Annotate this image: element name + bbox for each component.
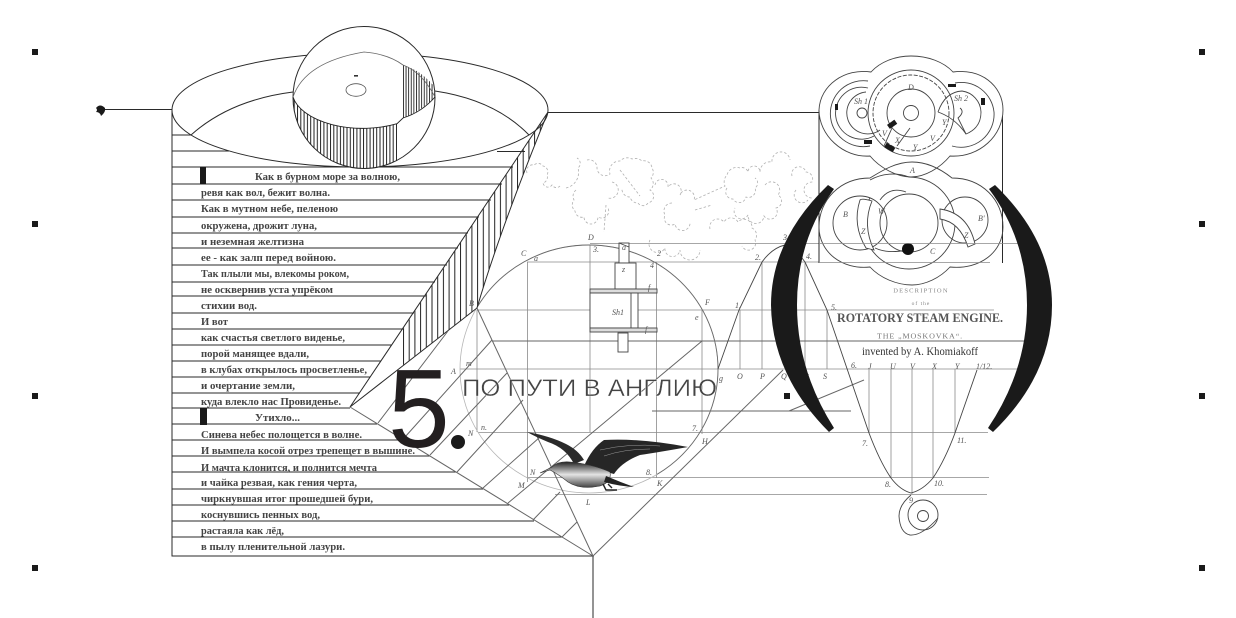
- engine diagram frame: [548, 110, 1002, 263]
- diagram letter labels: Y: [955, 362, 961, 371]
- diagram letter labels: Sh 1: [854, 97, 868, 106]
- upper engine section: [819, 56, 1003, 177]
- diagram letter labels: Sh1: [612, 308, 624, 317]
- diagram letter labels: m: [466, 359, 472, 368]
- diagram letter labels: 6.: [851, 361, 857, 370]
- poem text: не осквернив уста упрёком: [201, 284, 333, 296]
- diagram letter labels: U: [890, 362, 897, 371]
- diagram letter labels: 9: [909, 496, 913, 505]
- poem text: И вот: [201, 316, 229, 328]
- unfolded strip with diagonal lines: [350, 308, 783, 556]
- diagram letter labels: N: [467, 429, 474, 438]
- poem text: в пылу пленительной лазури.: [201, 541, 345, 553]
- engine description title: DESCRIPTION: [893, 288, 949, 294]
- diagram letter labels: M: [517, 481, 526, 490]
- diagram letter labels: 11.: [957, 436, 966, 445]
- diagram letter labels: 5.: [831, 303, 837, 312]
- engine description title: THE „MOSKOVKA“.: [877, 332, 963, 340]
- diagram letter labels: Z: [861, 227, 866, 236]
- black bar first stanza: [200, 167, 206, 184]
- diagram letter labels: 3: [782, 233, 787, 242]
- diagram letter labels: V: [930, 134, 936, 143]
- poem text: Как в бурном море за волною,: [255, 171, 400, 183]
- engine description title: invented by A. Khomiakoff: [862, 344, 978, 358]
- poem text: как счастья светлого виденье,: [201, 332, 345, 344]
- poem text: ревя как вол, бежит волна.: [201, 187, 330, 199]
- poem text: Как в мутном небе, пеленою: [201, 203, 338, 215]
- poem text: И мачта клонится, и полнится мечта: [201, 462, 377, 474]
- sine and parabola curve: [718, 245, 977, 493]
- diagram letter labels: g: [719, 374, 723, 383]
- cam at base of parabola: [899, 495, 938, 535]
- diagram letter labels: Q: [781, 372, 787, 381]
- diagram letter labels: 4: [650, 261, 654, 270]
- diagram letter labels: B: [469, 299, 474, 308]
- diagram letter labels: O: [737, 372, 743, 381]
- diagram letter labels: e: [695, 313, 699, 322]
- diagram letter labels: F: [704, 298, 710, 307]
- diagram letter labels: C: [930, 247, 936, 256]
- left poem block: cone ruled lines: [104, 110, 593, 618]
- diagram letter labels: f: [648, 283, 652, 292]
- poem text: Утихло...: [255, 412, 300, 424]
- diagram letter labels: W: [878, 207, 886, 216]
- diagram letter labels: 1/12.: [976, 362, 992, 371]
- poem text: и неземная желтизна: [201, 236, 304, 248]
- engraved construction grid: [460, 244, 1025, 494]
- diagram letter labels: a: [622, 243, 626, 252]
- poem text: [200, 167, 415, 553]
- diagram letter labels: Z: [964, 231, 969, 240]
- clouds engraving: [527, 152, 813, 260]
- hatched cone side: [403, 112, 548, 365]
- diagram letter labels: R: [803, 372, 809, 381]
- hook ornament: [96, 106, 105, 116]
- poem text: Синева небес полощется в волне.: [201, 429, 362, 441]
- diagram letter labels: 2.: [755, 253, 761, 262]
- diagram letter labels: z: [621, 265, 626, 274]
- diagram letter labels: A: [909, 166, 915, 175]
- circle construction: [460, 245, 718, 493]
- diagram letter labels: f: [645, 325, 649, 334]
- bird illustration: [527, 432, 688, 490]
- poem text: и чайка резвая, как гения черта,: [201, 477, 357, 489]
- piston diagram Sh1: [590, 243, 657, 352]
- diagram letter labels: J: [868, 362, 872, 371]
- diagram letter labels: 1.: [735, 301, 741, 310]
- poem text: чиркнувшая итог прошедшей бури,: [201, 493, 373, 505]
- diagram letter labels: B': [978, 214, 985, 223]
- diagram letter labels: N: [529, 468, 536, 477]
- diagram letter labels: 3.: [592, 245, 599, 254]
- diagram letter labels: Y: [942, 118, 948, 127]
- horizontal construction lines crossing the engine: [819, 244, 1018, 262]
- diagram letter labels: 2: [657, 249, 661, 258]
- poem text: куда влекло нас Провиденье.: [201, 396, 341, 408]
- diagram letter labels: 8.: [885, 480, 891, 489]
- diagram letter labels: a: [534, 254, 538, 263]
- poem text: и очертание земли,: [201, 380, 295, 392]
- diagram letter labels: C: [521, 249, 527, 258]
- right large parenthesis: [988, 185, 1052, 432]
- diagram letter labels: 7.: [862, 439, 868, 448]
- diagram letter labels: V: [910, 362, 916, 371]
- lower engine section: [819, 162, 1003, 285]
- diagram letter labels: H: [701, 437, 709, 446]
- poem text: И вымпела косой отрез трепещет в вышине.: [201, 445, 415, 457]
- left large parenthesis: [771, 185, 834, 432]
- engine description title: of the: [912, 300, 930, 307]
- black bar second stanza: [200, 408, 207, 425]
- diagram letter labels: V: [882, 129, 888, 138]
- ellipse bowl and sphere: [172, 26, 548, 169]
- diagram letter labels: Y: [913, 143, 919, 152]
- diagram letter labels: 7.: [692, 424, 698, 433]
- poem text: в клубах открылось просветленье,: [201, 364, 367, 376]
- big number 5: 5: [388, 347, 450, 471]
- chapter heading: ПО ПУТИ В АНГЛИЮ: [462, 375, 717, 402]
- poem text: порой манящее вдали,: [201, 348, 309, 360]
- diagram letter labels: 4.: [806, 252, 812, 261]
- sphere: [293, 26, 435, 169]
- diagram letter labels: K: [656, 479, 663, 488]
- diagram letter labels: X: [894, 136, 901, 145]
- engine description title: ROTATORY STEAM ENGINE.: [837, 311, 1003, 325]
- diagram letter labels: P: [759, 372, 765, 381]
- poem text: коснувшись пенных вод,: [201, 509, 320, 521]
- poem text: растаяла как лёд,: [201, 525, 284, 537]
- diagram letter labels: X: [931, 362, 938, 371]
- engine description title: [837, 288, 1003, 358]
- diagram letter labels: 8.: [646, 468, 652, 477]
- dot after number: [451, 435, 465, 449]
- diagram letter labels: D: [907, 83, 914, 92]
- diagram letter labels: n.: [481, 423, 487, 432]
- diagram letter labels: [450, 83, 992, 507]
- diagram letter labels: L: [585, 498, 591, 507]
- diagram letter labels: A: [450, 367, 456, 376]
- poem text: стихии вод.: [201, 300, 257, 312]
- diagram letter labels: S: [823, 372, 827, 381]
- poem text: ее - как залп перед войною.: [201, 252, 336, 264]
- poem text: окружена, дрожит луна,: [201, 220, 317, 232]
- diagram letter labels: B: [843, 210, 848, 219]
- diagram letter labels: D: [587, 233, 594, 242]
- poem text: Так плыли мы, влекомы роком,: [201, 268, 349, 280]
- diagram letter labels: Sh 2: [954, 94, 968, 103]
- diagram letter labels: 10.: [934, 479, 944, 488]
